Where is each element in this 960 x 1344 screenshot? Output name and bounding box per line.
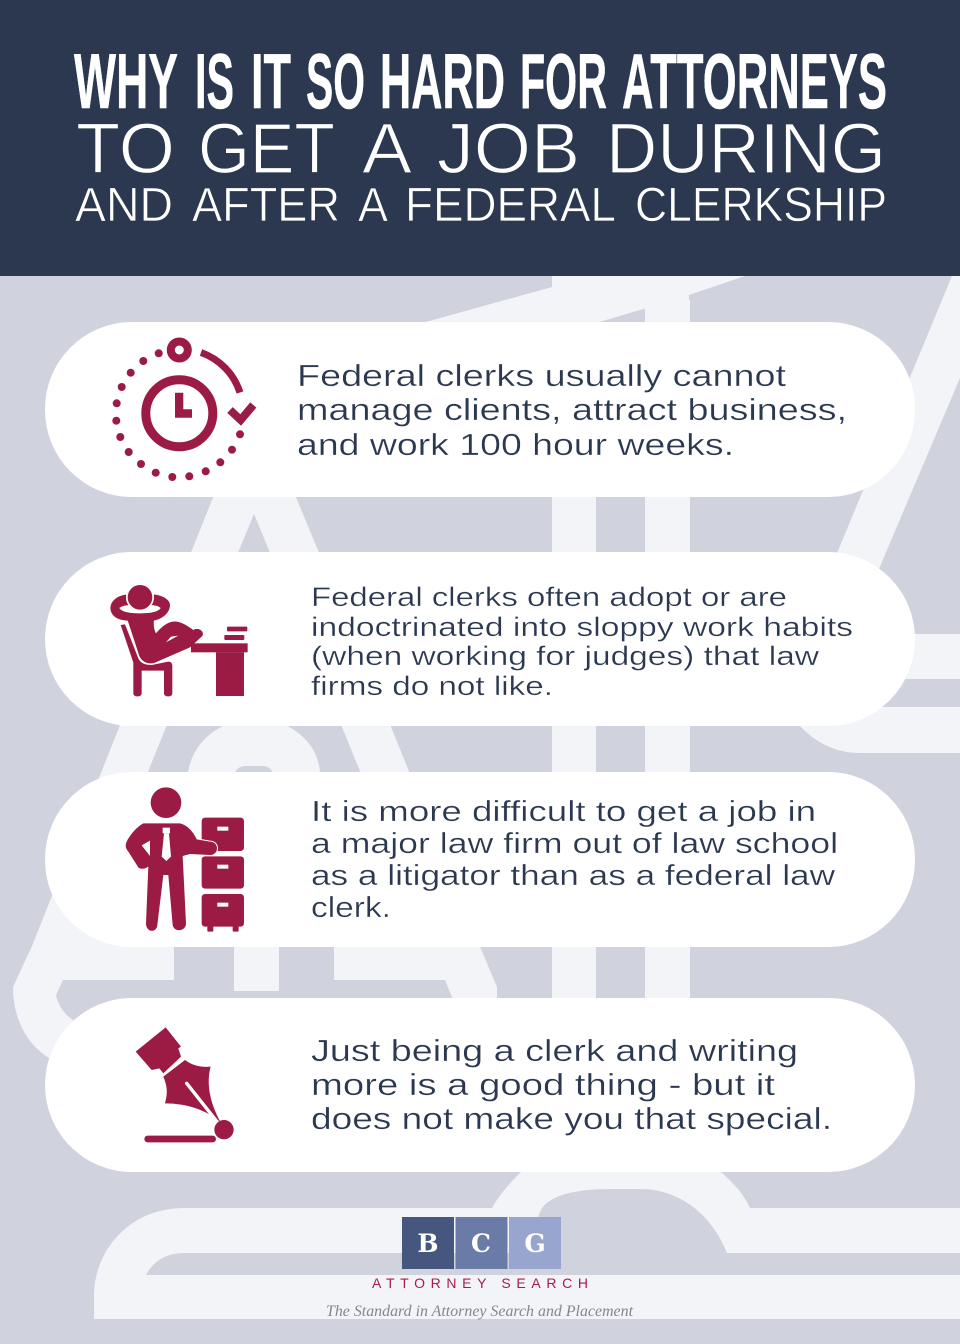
header banner xyxy=(0,0,960,276)
text: litigator job: as a litigator than as a federal law xyxy=(311,860,836,892)
logo square B: B xyxy=(417,1229,439,1258)
title line 3: CLERKSHIP xyxy=(635,179,887,232)
text: writing more: Just being a clerk and writing xyxy=(311,1033,798,1068)
text: litigator job: clerk. xyxy=(311,892,391,924)
text: writing more: does not make you that special. xyxy=(311,1101,832,1136)
logo square C xyxy=(456,1217,508,1269)
panel: litigator job xyxy=(45,772,915,947)
text: writing more: more is a good thing - but it xyxy=(311,1067,775,1102)
text: manage clients: manage clients, attract business, xyxy=(297,392,847,427)
logo square G: G xyxy=(524,1229,546,1258)
title line 3: A xyxy=(358,179,388,232)
text: litigator job xyxy=(311,796,838,924)
title line 3: FEDERAL xyxy=(405,179,616,232)
title line 2: JOB xyxy=(437,110,580,189)
logo square C: C xyxy=(471,1229,491,1258)
icon: clock with dotted cycle xyxy=(112,342,253,481)
text: sloppy work habits xyxy=(311,582,853,701)
title line 3: AND xyxy=(75,179,173,232)
title line 1: IT xyxy=(251,37,291,125)
logo wordmark: ATTORNEY SEARCH xyxy=(372,1275,588,1291)
title line 2: DURING xyxy=(606,110,886,189)
title line 1: HARD xyxy=(380,37,505,125)
icon: relaxed worker at desk xyxy=(110,585,248,696)
title line 3: AFTER xyxy=(192,179,340,232)
title line 2: GET xyxy=(198,110,335,189)
title line 1: FOR xyxy=(520,37,607,125)
title line 1: WHY xyxy=(74,37,178,125)
title line 2: TO xyxy=(76,110,175,189)
logo square B xyxy=(402,1217,454,1269)
panel: writing more xyxy=(45,998,915,1172)
text: manage clients xyxy=(297,358,847,462)
logo: BCG Attorney Search xyxy=(326,1217,634,1320)
title line 2 xyxy=(76,110,886,189)
title line 2: A xyxy=(362,110,413,189)
text: litigator job: It is more difficult to get a job in xyxy=(311,796,816,828)
icon: man at filing cabinet xyxy=(126,787,244,932)
title line 3 xyxy=(75,179,887,232)
text: sloppy work habits: Federal clerks often adopt or are xyxy=(311,582,787,612)
text: sloppy work habits: (when working for judges) that law xyxy=(311,641,820,671)
text: manage clients: and work 100 hour weeks. xyxy=(297,427,734,462)
icon: fountain pen nib xyxy=(136,1027,234,1142)
title xyxy=(74,37,887,232)
title line 1 xyxy=(74,37,887,125)
text: sloppy work habits: firms do not like. xyxy=(311,671,553,701)
panel: manage clients xyxy=(45,322,915,497)
title line 1: SO xyxy=(306,37,365,125)
background road pattern xyxy=(13,276,960,1319)
text: sloppy work habits: indoctrinated into sloppy work habits xyxy=(311,612,853,642)
logo square G xyxy=(509,1217,561,1269)
text: litigator job: a major law firm out of law school xyxy=(311,828,838,860)
logo tagline: The Standard in Attorney Search and Placement xyxy=(326,1303,634,1320)
text: writing more xyxy=(311,1033,832,1136)
panel: sloppy work habits xyxy=(45,552,915,726)
title line 1: IS xyxy=(195,37,234,125)
text: manage clients: Federal clerks usually cannot xyxy=(297,358,786,393)
